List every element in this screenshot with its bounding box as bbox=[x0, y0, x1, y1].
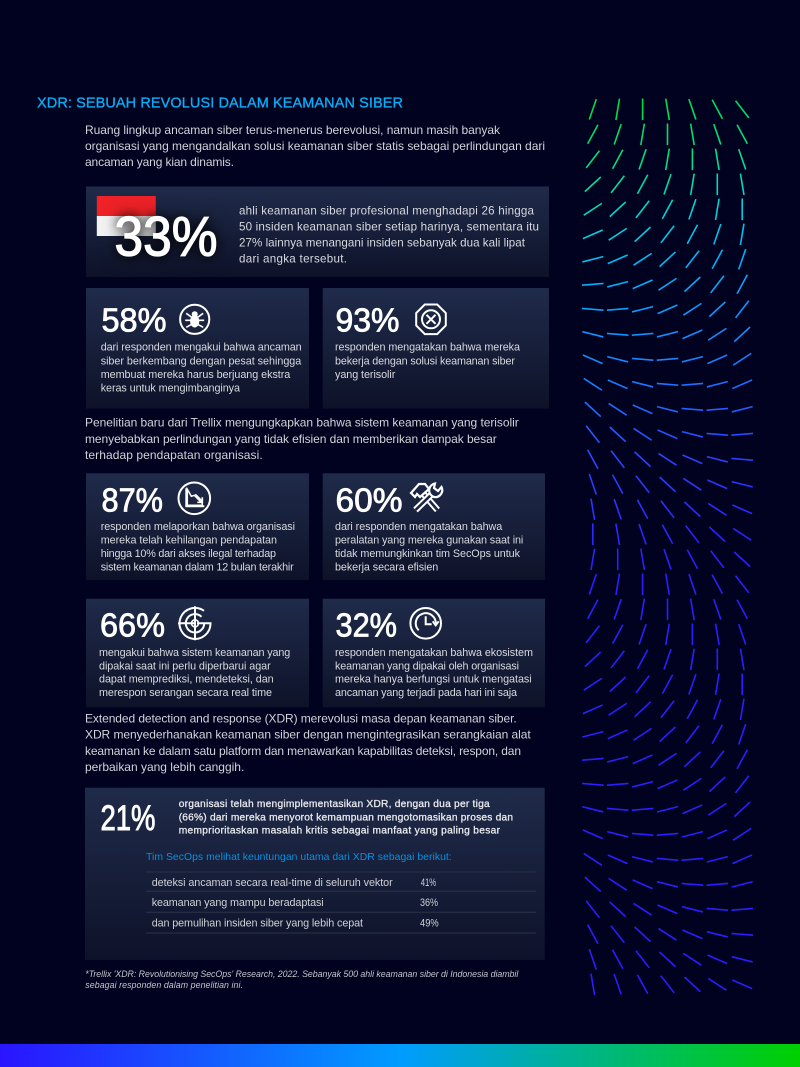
intro paragraph: Ruang lingkup ancaman siber terus-menerus berevolusi, namun masih banyak bbox=[85, 123, 501, 137]
icon: hammer and wrench bbox=[411, 484, 442, 510]
stat: 60%: 60% bbox=[336, 481, 402, 518]
XDR paragraph bbox=[85, 712, 531, 774]
row: adaptive security bbox=[152, 897, 438, 909]
description bbox=[179, 799, 513, 837]
research paragraph: menyebabkan perlindungan yang tidak efisien dan memberikan dampak besar bbox=[85, 432, 497, 446]
panel: 87% stat bbox=[86, 473, 309, 580]
row: faster recovery: dan pemulihan insiden siber yang lebih cepat bbox=[152, 918, 363, 930]
panel: 33% stat bbox=[86, 186, 549, 277]
panel: 66% stat bbox=[86, 599, 309, 707]
description: responden mengatakan bahwa mereka bbox=[335, 342, 520, 354]
intro paragraph: ancaman yang kian dinamis. bbox=[85, 155, 234, 169]
row: threat detection: 41% bbox=[421, 877, 436, 889]
panel: 60% stat bbox=[323, 473, 545, 580]
description: dari responden mengakui bahwa ancaman bbox=[101, 342, 302, 354]
description: mereka telah kehilangan pendapatan bbox=[101, 535, 277, 547]
description bbox=[335, 647, 533, 699]
decorative wave line field bbox=[580, 90, 760, 1000]
footnote: sebagai responden dalam penelitian ini. bbox=[85, 980, 243, 990]
intro paragraph bbox=[85, 123, 545, 169]
description: bekerja secara efisien bbox=[335, 561, 438, 573]
description: keamanan yang dipakai oleh organisasi bbox=[335, 660, 519, 672]
description: yang terisolir bbox=[335, 369, 396, 381]
description bbox=[239, 204, 539, 266]
description: keras untuk mengimbanginya bbox=[101, 383, 240, 395]
icon: clock with arrow bbox=[410, 608, 441, 639]
description: bekerja dengan solusi keamanan siber bbox=[335, 355, 515, 367]
description bbox=[335, 342, 520, 381]
description: responden melaporkan bahwa organisasi bbox=[101, 521, 295, 533]
icon: bug bbox=[180, 305, 209, 334]
stat: 21%: 21% bbox=[100, 799, 156, 838]
description: 27% lainnya menangani insiden sebanyak dua kali lipat bbox=[239, 237, 526, 250]
description: mengakui bahwa sistem keamanan yang bbox=[99, 647, 290, 659]
panel: 58% stat bbox=[86, 288, 309, 408]
description: dipakai saat ini perlu diperbarui agar bbox=[99, 660, 271, 672]
stat: 87%: 87% bbox=[102, 481, 163, 518]
stat: 93%: 93% bbox=[336, 302, 400, 339]
stat: 33%: 33% bbox=[114, 205, 218, 268]
stat: 58%: 58% bbox=[102, 302, 166, 339]
research paragraph: Penelitian baru dari Trellix mengungkapkan bahwa sistem keamanan yang terisolir bbox=[85, 416, 519, 430]
icon: declining chart bbox=[178, 482, 210, 514]
description: (66%) dari mereka menyorot kemampuan mengotomasikan proses dan bbox=[179, 812, 513, 823]
footnote bbox=[85, 969, 519, 990]
description: dapat memprediksi, mendeteksi, dan bbox=[99, 674, 274, 686]
row: faster recovery: 49% bbox=[420, 918, 439, 930]
description: peralatan yang mereka gunakan saat ini bbox=[335, 535, 523, 547]
description bbox=[101, 521, 295, 573]
description: dari angka tersebut. bbox=[239, 253, 347, 266]
description bbox=[335, 521, 523, 573]
panel: 32% stat bbox=[323, 599, 545, 707]
description bbox=[99, 647, 290, 699]
benefits table bbox=[146, 872, 536, 933]
description: mereka hanya berfungsi untuk mengatasi bbox=[335, 674, 532, 686]
panel: 21% XDR adoption and benefits bbox=[85, 788, 545, 960]
description: tidak memungkinkan tim SecOps untuk bbox=[335, 548, 521, 560]
description: membuat mereka harus berjuang ekstra bbox=[101, 369, 290, 381]
intro paragraph: organisasi yang mengandalkan solusi keamanan siber statis sebagai perlindungan dari bbox=[85, 139, 545, 153]
row: adaptive security: 36% bbox=[420, 897, 438, 909]
title: XDR: SEBUAH REVOLUSI DALAM KEAMANAN SIBER bbox=[37, 96, 403, 112]
stat: 66%: 66% bbox=[100, 607, 165, 644]
icon: Indonesian flag bbox=[97, 196, 156, 236]
description: siber berkembang dengan pesat sehingga bbox=[101, 355, 301, 367]
research paragraph bbox=[85, 416, 519, 462]
description: responden mengatakan bahwa ekosistem bbox=[335, 647, 533, 659]
stat: 32%: 32% bbox=[336, 607, 397, 644]
description: sistem keamanan dalam 12 bulan terakhir bbox=[101, 561, 294, 573]
description bbox=[101, 342, 302, 395]
description: organisasi telah mengimplementasikan XDR, dengan dua per tiga bbox=[179, 799, 490, 810]
icon: radar target bbox=[178, 606, 211, 640]
panel: 93% stat bbox=[323, 288, 549, 408]
description: dari responden mengatakan bahwa bbox=[335, 521, 502, 533]
description: 50 insiden keamanan siber setiap harinya, sementara itu bbox=[239, 220, 539, 233]
row: threat detection: deteksi ancaman secara real-time di seluruh vektor bbox=[152, 877, 393, 889]
bottom gradient bar bbox=[0, 1044, 800, 1067]
description: ahli keamanan siber profesional menghadapi 26 hingga bbox=[239, 204, 535, 217]
footnote: *Trellix 'XDR: Revolutionising SecOps' Research, 2022. Sebanyak 500 ahli keamanan siber di Indonesia diambil bbox=[85, 969, 519, 979]
description: merespon serangan secara real time bbox=[99, 687, 272, 699]
icon: octagon cross bbox=[416, 304, 446, 334]
XDR paragraph: perbaikan yang lebih canggih. bbox=[85, 760, 244, 774]
benefits heading: Tim SecOps melihat keuntungan utama dari XDR sebagai berikut: bbox=[146, 852, 452, 863]
row: adaptive security: keamanan yang mampu beradaptasi bbox=[152, 897, 324, 909]
research paragraph: terhadap pendapatan organisasi. bbox=[85, 448, 263, 462]
XDR paragraph: keamanan ke dalam satu platform dan menawarkan kapabilitas deteksi, respon, dan bbox=[85, 744, 521, 758]
XDR paragraph: XDR menyederhanakan keamanan siber dengan mengintegrasikan serangkaian alat bbox=[85, 728, 531, 742]
description: memprioritaskan masalah kritis sebagai manfaat yang paling besar bbox=[179, 826, 501, 837]
XDR paragraph: Extended detection and response (XDR) merevolusi masa depan keamanan siber. bbox=[85, 712, 517, 726]
description: ancaman yang terjadi pada hari ini saja bbox=[335, 687, 517, 699]
description: hingga 10% dari akses ilegal terhadap bbox=[101, 548, 276, 560]
